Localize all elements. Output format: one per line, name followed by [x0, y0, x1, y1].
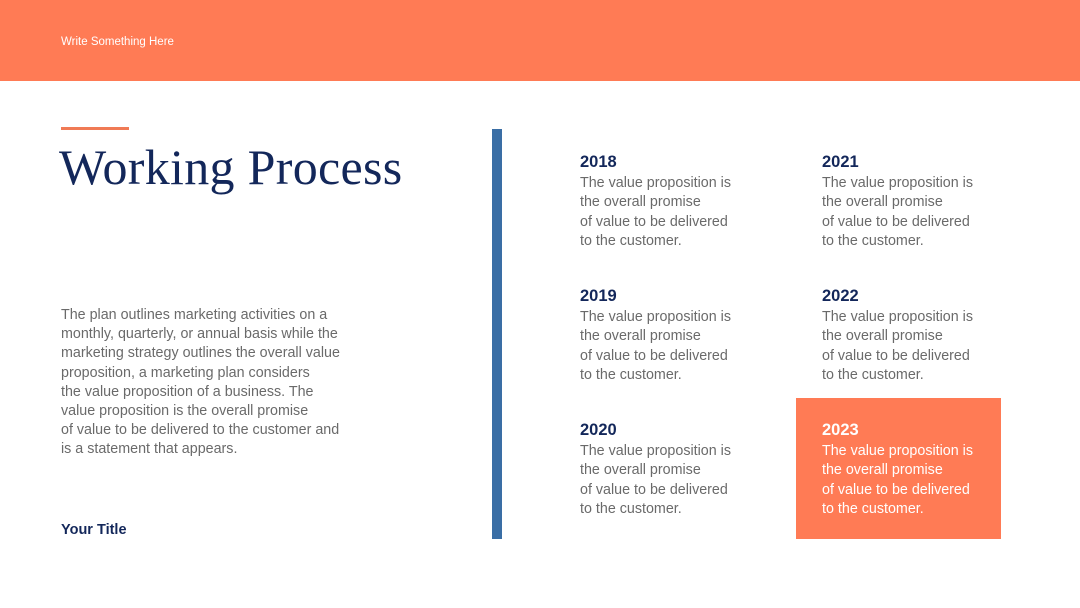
item 2020: of value to be delivered [580, 482, 728, 498]
header text: Write Something Here [61, 36, 174, 48]
item 2023: of value to be delivered [822, 482, 970, 498]
body text: monthly, quarterly, or annual basis while the [61, 326, 338, 342]
accent line [61, 127, 129, 130]
vertical divider bar [492, 129, 502, 539]
subtitle: Your Title [61, 522, 127, 538]
item 2021: the overall promise [822, 194, 943, 210]
body text: proposition, a marketing plan considers [61, 365, 310, 381]
body text: of value to be delivered to the customer and [61, 422, 339, 438]
item 2023: The value proposition is [822, 443, 973, 459]
item 2020: the overall promise [580, 462, 701, 478]
item 2022: to the customer. [822, 367, 924, 383]
item 2018: The value proposition is [580, 175, 731, 191]
item 2018: 2018 [580, 153, 617, 171]
item 2019: the overall promise [580, 328, 701, 344]
item 2018: to the customer. [580, 233, 682, 249]
item 2018 [580, 153, 731, 249]
item 2023: 2023 [822, 421, 859, 439]
item 2020: The value proposition is [580, 443, 731, 459]
item 2020: 2020 [580, 421, 617, 439]
title: Working Process [59, 139, 402, 195]
body text [61, 307, 340, 457]
item 2023: to the customer. [822, 501, 924, 517]
item 2022: of value to be delivered [822, 348, 970, 364]
body text: marketing strategy outlines the overall value [61, 345, 340, 361]
highlight box 2023 [796, 398, 1001, 539]
item 2018: of value to be delivered [580, 214, 728, 230]
item 2020: to the customer. [580, 501, 682, 517]
item 2021 [822, 153, 973, 249]
item 2021: of value to be delivered [822, 214, 970, 230]
item 2019: 2019 [580, 287, 617, 305]
body text: value proposition is the overall promise [61, 403, 308, 419]
item 2023: the overall promise [822, 462, 943, 478]
item 2022: 2022 [822, 287, 859, 305]
item 2019: of value to be delivered [580, 348, 728, 364]
item 2020 [580, 421, 731, 517]
body text: The plan outlines marketing activities on a [61, 307, 327, 323]
item 2023 [822, 421, 973, 517]
item 2021: 2021 [822, 153, 859, 171]
item 2019 [580, 287, 731, 383]
body text: the value proposition of a business. The [61, 384, 313, 400]
item 2022: the overall promise [822, 328, 943, 344]
item 2018: the overall promise [580, 194, 701, 210]
item 2019: The value proposition is [580, 309, 731, 325]
item 2022 [822, 287, 973, 383]
body text: is a statement that appears. [61, 441, 237, 457]
item 2022: The value proposition is [822, 309, 973, 325]
header bar [0, 0, 1080, 81]
item 2021: The value proposition is [822, 175, 973, 191]
item 2019: to the customer. [580, 367, 682, 383]
item 2021: to the customer. [822, 233, 924, 249]
